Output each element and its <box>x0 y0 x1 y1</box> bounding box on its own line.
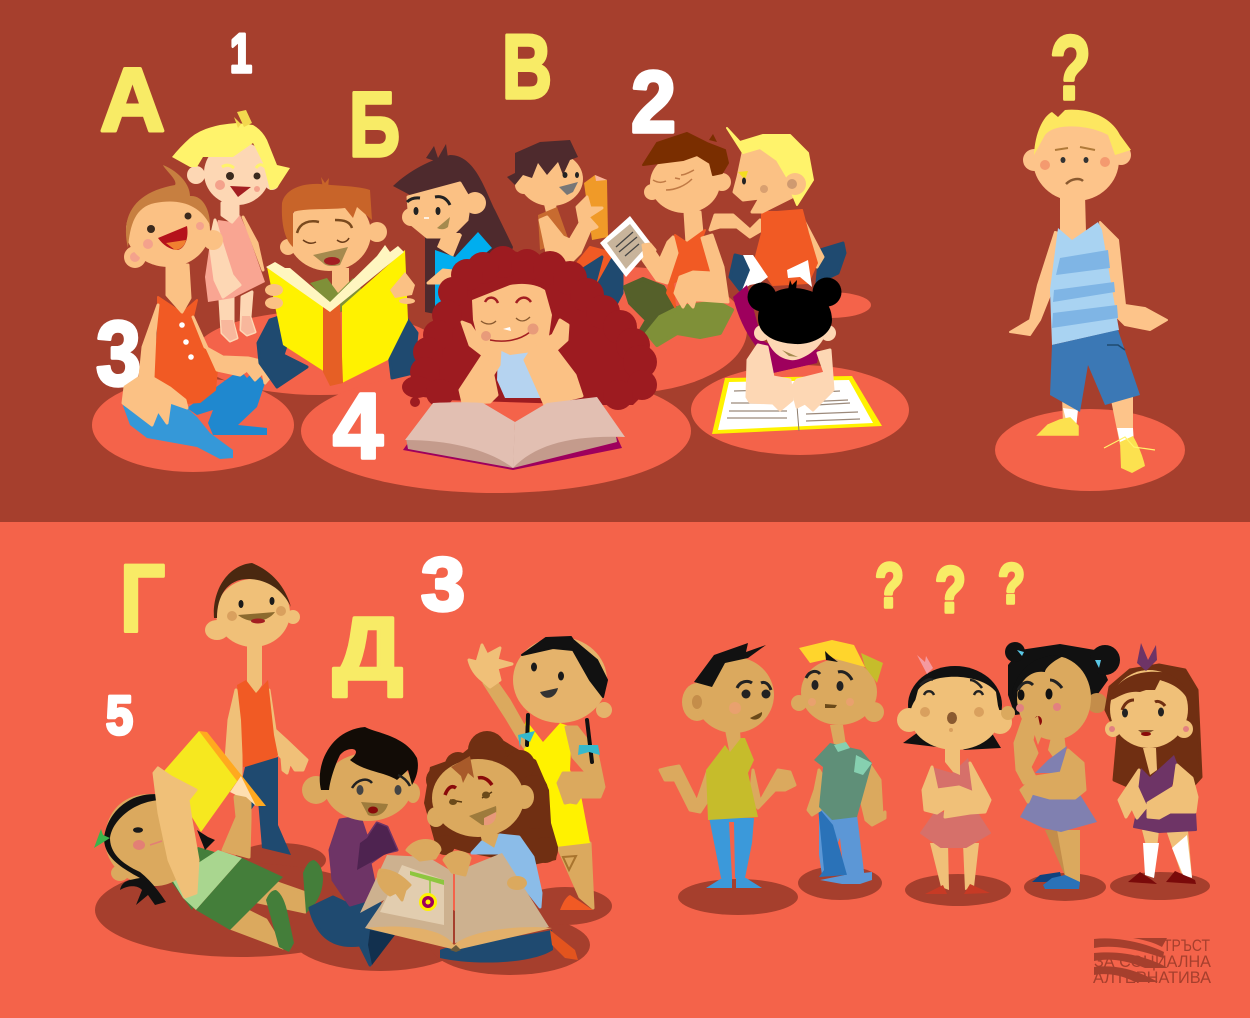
boy in orange shirt <box>122 165 270 459</box>
letter Д: Д <box>333 599 403 698</box>
open book with flower illustration <box>360 841 578 963</box>
girl with dark long hair, blue shirt <box>393 144 513 315</box>
number 1: 1 <box>230 22 252 84</box>
child with orange book <box>507 140 622 310</box>
number 2: 2 <box>631 54 676 151</box>
curly red-haired girl with open book <box>402 246 657 470</box>
letter Г: Г <box>120 545 165 652</box>
logo: Тръст за социална алтернатива: ЗА СОЦИАЛНА <box>1094 952 1212 971</box>
boy in yellow shirt shrugging <box>660 643 795 888</box>
floor mats <box>92 267 1185 493</box>
girl with black bob, pink dress <box>897 655 1012 894</box>
standing boy with blue striped tank top <box>1010 110 1167 473</box>
boy in purple pointing at book <box>302 727 420 965</box>
letter Б: Б <box>349 74 400 176</box>
floor shadows <box>95 843 1210 975</box>
three question marks: ? <box>875 551 904 621</box>
question mark above standing boy: ? <box>1050 18 1091 119</box>
panel: top half, children reading <box>0 0 1250 522</box>
blonde girl in pink dress <box>172 110 290 341</box>
number 4: 4 <box>333 374 383 478</box>
girl with brown hair <box>424 731 558 907</box>
girl lying down with yellow book <box>94 731 323 952</box>
girl with long brown hair, purple dress <box>1105 643 1201 884</box>
letter А: А <box>100 51 165 151</box>
boy with tablet <box>600 133 732 345</box>
logo: Тръст за социална алтернатива <box>1093 936 1212 987</box>
boy with yellow cap, green shirt <box>791 640 885 884</box>
blonde child from behind, orange top <box>710 128 845 290</box>
panel: bottom half, children discussing <box>0 522 1250 1018</box>
number 3: 3 <box>421 542 465 626</box>
girl with black hair buns reading on floor <box>712 278 882 434</box>
three question marks: ? <box>998 552 1025 616</box>
number 5: 5 <box>106 684 133 746</box>
three question marks <box>875 551 1025 626</box>
boy reading yellow book <box>258 177 417 387</box>
tall boy in orange shirt <box>205 563 307 855</box>
girl with black buns, periwinkle dress <box>1001 642 1120 889</box>
logo: Тръст за социална алтернатива: ТРЪСТ <box>1163 936 1210 955</box>
girl in yellow dress waving <box>469 637 612 910</box>
logo: Тръст за социална алтернатива: АЛТЕРНАТИВА <box>1093 968 1212 987</box>
number 3: 3 <box>96 303 141 405</box>
three question marks: ? <box>935 553 966 626</box>
letter В: В <box>502 17 552 118</box>
